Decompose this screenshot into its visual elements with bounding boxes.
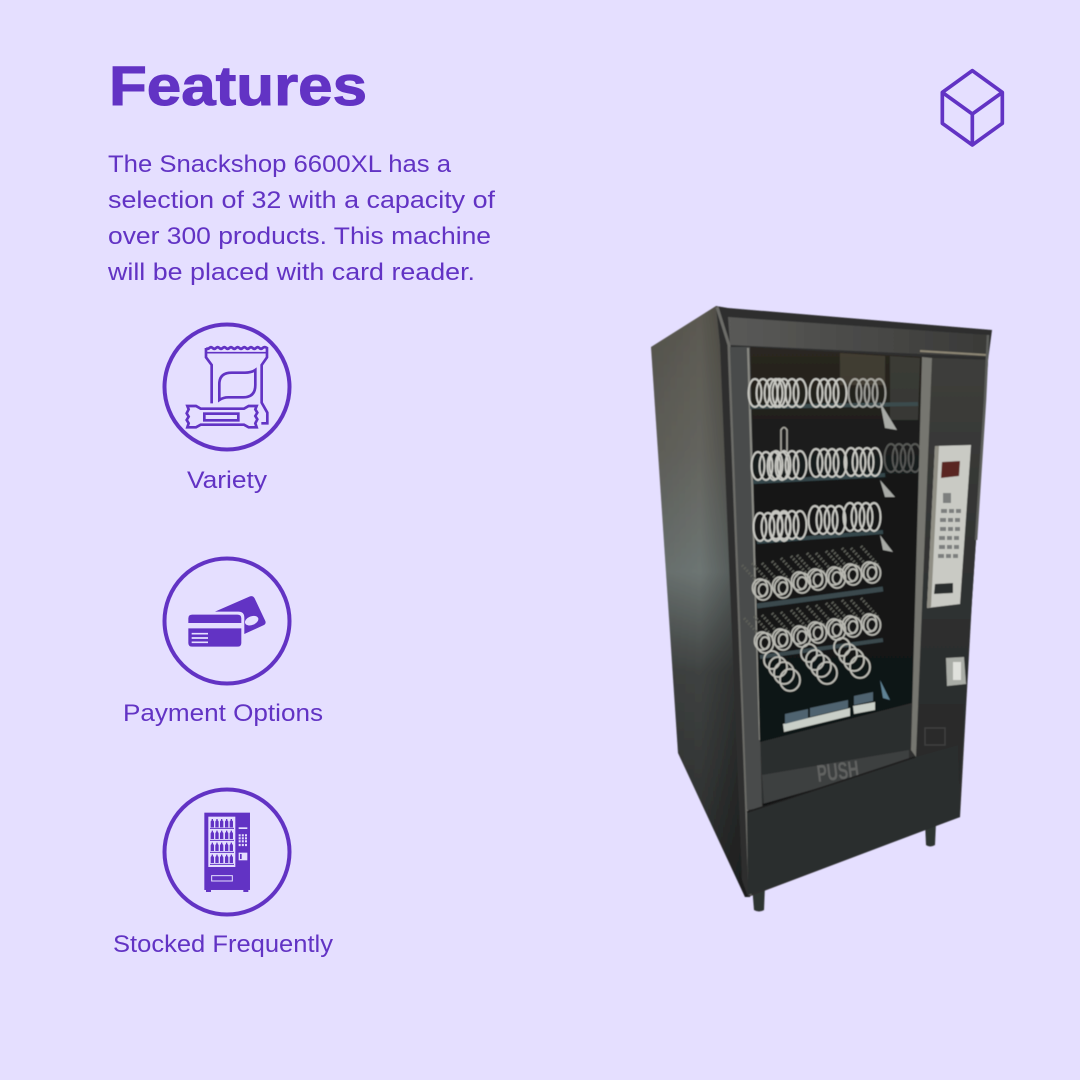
push label: PUSH: [815, 756, 860, 788]
machine side panel: [651, 306, 750, 897]
icon: credit cards: [164, 558, 290, 684]
button recess: [925, 728, 945, 745]
window glass: [750, 347, 922, 742]
shelf 2: [752, 428, 922, 497]
window reflections: [840, 353, 920, 420]
tag holders: [785, 692, 873, 724]
text block: description: selection of 32 with a capacity of: [108, 187, 495, 214]
machine header: [728, 317, 987, 357]
shelf 6: [764, 638, 890, 700]
machine right panel: [915, 358, 988, 810]
card slot: [934, 583, 953, 594]
delivery flap edge: [763, 763, 909, 805]
door right strip: [911, 357, 932, 757]
label: stocked frequently: Stocked Frequently: [113, 931, 333, 958]
coin mechanism: [946, 657, 966, 686]
text block: description: over 300 products. This machine: [108, 223, 491, 250]
title: Features: [109, 54, 367, 117]
upper shelves: [748, 379, 922, 552]
lower shelves: [741, 545, 890, 732]
feature: payment options: [123, 558, 323, 727]
shelf 5: [743, 597, 883, 657]
price tags: [783, 702, 875, 732]
machine right edge: [976, 335, 988, 540]
icon: vending machine: [164, 790, 290, 914]
text block: description: [107, 151, 495, 286]
feature: variety: [164, 324, 290, 494]
shelf 4: [741, 545, 883, 606]
text block: description: The Snackshop 6600XL has a: [108, 151, 452, 178]
red display: [941, 461, 960, 478]
machine base: [747, 745, 960, 895]
door left strip: [730, 347, 762, 810]
machine frame edge: [717, 307, 750, 895]
icon: snack bag and bar: [164, 324, 290, 450]
label: payment options: Payment Options: [123, 700, 323, 727]
keypad panel: [927, 445, 971, 608]
text block: description: will be placed with card reader.: [107, 259, 475, 286]
header trim: [920, 351, 987, 355]
label: variety: Variety: [187, 467, 267, 494]
icon: cube: [942, 71, 1002, 145]
machine front frame: [716, 306, 992, 897]
delivery flap: [762, 750, 909, 804]
delivery panel: [761, 705, 911, 804]
keypad buttons: [938, 493, 961, 558]
shelf 1: [748, 379, 918, 430]
machine feet: [752, 822, 936, 912]
door strip highlight: [748, 348, 760, 740]
shelf 3: [754, 503, 893, 552]
feature: stocked frequently: [113, 790, 333, 958]
vending machine photo: [651, 306, 992, 912]
base highlight: [747, 757, 915, 812]
